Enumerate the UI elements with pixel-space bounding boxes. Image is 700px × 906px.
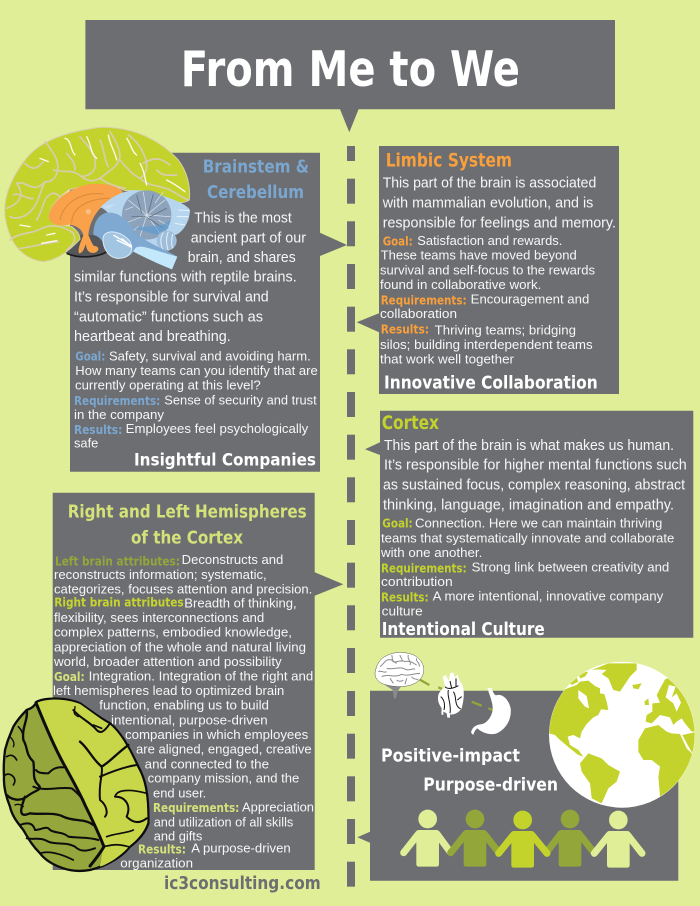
- intro text: [383, 437, 687, 513]
- attributes and goal text: Appreciation: [242, 800, 314, 815]
- intro text: “automatic” functions such as: [74, 308, 263, 325]
- goal, requirements, results text: [380, 233, 595, 367]
- goal, requirements, results text: Satisfaction and rewards.: [417, 233, 562, 248]
- heading: Limbic System: [386, 150, 512, 172]
- panel: brainstem and cerebellum: [5, 127, 347, 472]
- attributes and goal text: complex patterns, embodied knowledge,: [54, 625, 292, 640]
- goal, requirements, results text: silos; building interdependent teams: [380, 337, 593, 352]
- attributes and goal text: companies in which employees: [125, 727, 309, 742]
- intro text: [74, 209, 306, 345]
- intro text: [382, 175, 616, 231]
- goal, requirements, results text: teams that systematically innovate and collaborate: [381, 530, 674, 545]
- attributes and goal text: [53, 552, 314, 870]
- attributes and goal text: intentional, purpose-driven: [111, 712, 268, 727]
- icon: heart: [438, 672, 464, 718]
- goal, requirements, results text: with one another.: [380, 545, 482, 560]
- goal, requirements, results text: [74, 349, 318, 451]
- icon: top-view brain: [4, 699, 148, 871]
- attributes and goal text: and gifts: [154, 829, 203, 844]
- people holding hands: [404, 810, 642, 868]
- goal, requirements, results text: currently operating at this level?: [75, 378, 261, 393]
- attributes and goal text: company mission, and the: [148, 771, 299, 786]
- goal, requirements, results text: Results:: [381, 589, 429, 604]
- goal, requirements, results text: collaboration: [380, 306, 457, 321]
- intro text: responsible for feelings and memory.: [383, 214, 616, 231]
- intro text: with mammalian evolution, and is: [382, 195, 593, 212]
- goal, requirements, results text: Connection. Here we can maintain thriving: [415, 516, 662, 531]
- icon: small brain: [375, 652, 424, 698]
- person 2: [451, 810, 499, 867]
- heading: Cortex: [382, 412, 439, 434]
- goal, requirements, results text: Requirements:: [381, 560, 467, 575]
- attributes and goal text: appreciation of the whole and natural living: [54, 639, 306, 654]
- goal, requirements, results text: Strong link between creativity and: [472, 559, 669, 574]
- goal, requirements, results text: survival and self-focus to the rewards: [380, 262, 595, 277]
- label: Innovative Collaboration: Innovative Collaboration: [384, 373, 598, 393]
- intro text: It’s responsible for higher mental functions such: [384, 457, 687, 474]
- intro text: ancient part of our: [191, 229, 306, 246]
- attributes and goal text: Requirements:: [153, 800, 239, 815]
- heading: Right and Left Hemispheres: [68, 501, 307, 522]
- intro text: brain, and shares: [188, 249, 296, 266]
- icons: brain, heart and stomach: [375, 652, 511, 735]
- person 5: [594, 811, 642, 868]
- attributes and goal text: Right brain attributes: [54, 595, 184, 610]
- attributes and goal text: organization: [120, 855, 193, 870]
- goal, requirements, results text: Requirements:: [381, 292, 467, 307]
- heading: of the Cortex: [131, 527, 243, 548]
- intro text: as sustained focus, complex reasoning, abstract: [383, 476, 686, 493]
- attributes and goal text: are aligned, engaged, creative: [136, 742, 312, 757]
- timeline: dashed centre line: [347, 146, 355, 887]
- goal, requirements, results text: Sense of security and trust: [164, 392, 317, 407]
- goal, requirements, results text: culture: [382, 603, 423, 618]
- goal, requirements, results text: How many teams can you identify that are: [75, 363, 318, 378]
- attributes and goal text: end user.: [153, 785, 206, 800]
- goal, requirements, results text: Goal:: [383, 233, 413, 248]
- person 3: [499, 811, 547, 868]
- attributes and goal text: Goal:: [54, 669, 85, 684]
- connector dashes: [419, 679, 494, 710]
- heading: [68, 501, 307, 548]
- intro text: This part of the brain is associated: [383, 175, 596, 192]
- intro text: heartbeat and breathing.: [74, 328, 231, 345]
- intro text: thinking, language, imagination and empathy.: [383, 496, 674, 513]
- goal, requirements, results text: Employees feel psychologically: [126, 421, 309, 436]
- icon: stomach: [471, 688, 511, 735]
- icon: earth globe: [543, 662, 700, 808]
- intro text: This is the most: [194, 209, 292, 226]
- panel: right and left hemispheres: [53, 493, 343, 870]
- attributes and goal text: left hemispheres lead to optimized brain: [53, 683, 284, 698]
- goal, requirements, results text: that work well together: [380, 352, 515, 367]
- intro text: It’s responsible for survival and: [74, 289, 269, 306]
- attributes and goal text: reconstructs information; systematic,: [54, 567, 267, 582]
- attributes and goal text: and utilization of all skills: [154, 814, 294, 829]
- goal, requirements, results text: These teams have moved beyond: [381, 248, 577, 263]
- attributes and goal text: and connected to the: [145, 756, 269, 771]
- goal, requirements, results text: in the company: [74, 407, 165, 422]
- title: From Me to We: [181, 41, 520, 98]
- attributes and goal text: Left brain attributes:: [55, 554, 180, 569]
- heading: [203, 156, 309, 203]
- person 4: [546, 810, 594, 867]
- attributes and goal text: categorizes, focuses attention and precision.: [54, 582, 312, 597]
- title banner: [85, 20, 615, 132]
- label: Purpose-driven: Purpose-driven: [423, 775, 558, 796]
- goal, requirements, results text: contribution: [381, 574, 453, 589]
- goal, requirements, results text: Encouragement and: [471, 291, 589, 306]
- goal, requirements, results text: found in collaborative work.: [380, 277, 541, 292]
- attributes and goal text: Results:: [138, 841, 186, 856]
- goal, requirements, results text: Results:: [381, 322, 429, 337]
- panel: limbic system: [357, 146, 619, 394]
- goal, requirements, results text: Requirements:: [74, 393, 160, 408]
- person 1: [404, 810, 450, 867]
- intro text: This part of the brain is what makes us human.: [384, 437, 674, 454]
- attributes and goal text: function, enabling us to build: [99, 698, 269, 713]
- goal, requirements, results text: Thriving teams; bridging: [435, 322, 576, 337]
- goal, requirements, results text: [380, 516, 674, 618]
- label: Positive-impact: Positive-impact: [381, 746, 520, 767]
- panel: cortex: [365, 411, 693, 640]
- label: Insightful Companies: Insightful Companies: [134, 451, 316, 471]
- panel: positive impact: [357, 652, 700, 881]
- attributes and goal text: Breadth of thinking,: [184, 595, 297, 610]
- label: Intentional Culture: Intentional Culture: [382, 620, 545, 640]
- attributes and goal text: flexibility, sees interconnections and: [54, 610, 264, 625]
- footer url: ic3consulting.com: [164, 873, 321, 894]
- attributes and goal text: A purpose-driven: [191, 841, 291, 856]
- goal, requirements, results text: Goal:: [382, 516, 413, 531]
- intro text: similar functions with reptile brains.: [74, 269, 297, 286]
- goal, requirements, results text: safe: [74, 436, 98, 451]
- attributes and goal text: Integration. Integration of the right and: [89, 668, 313, 683]
- goal, requirements, results text: Results:: [74, 422, 122, 437]
- heading: Cerebellum: [207, 182, 304, 203]
- attributes and goal text: world, broader attention and possibility: [53, 654, 282, 669]
- attributes and goal text: Deconstructs and: [182, 552, 283, 567]
- heading: Brainstem &: [203, 156, 309, 177]
- goal, requirements, results text: Safety, survival and avoiding harm.: [109, 349, 311, 364]
- icon: side-view brain: [5, 127, 190, 269]
- goal, requirements, results text: A more intentional, innovative company: [433, 589, 664, 604]
- goal, requirements, results text: Goal:: [75, 349, 105, 364]
